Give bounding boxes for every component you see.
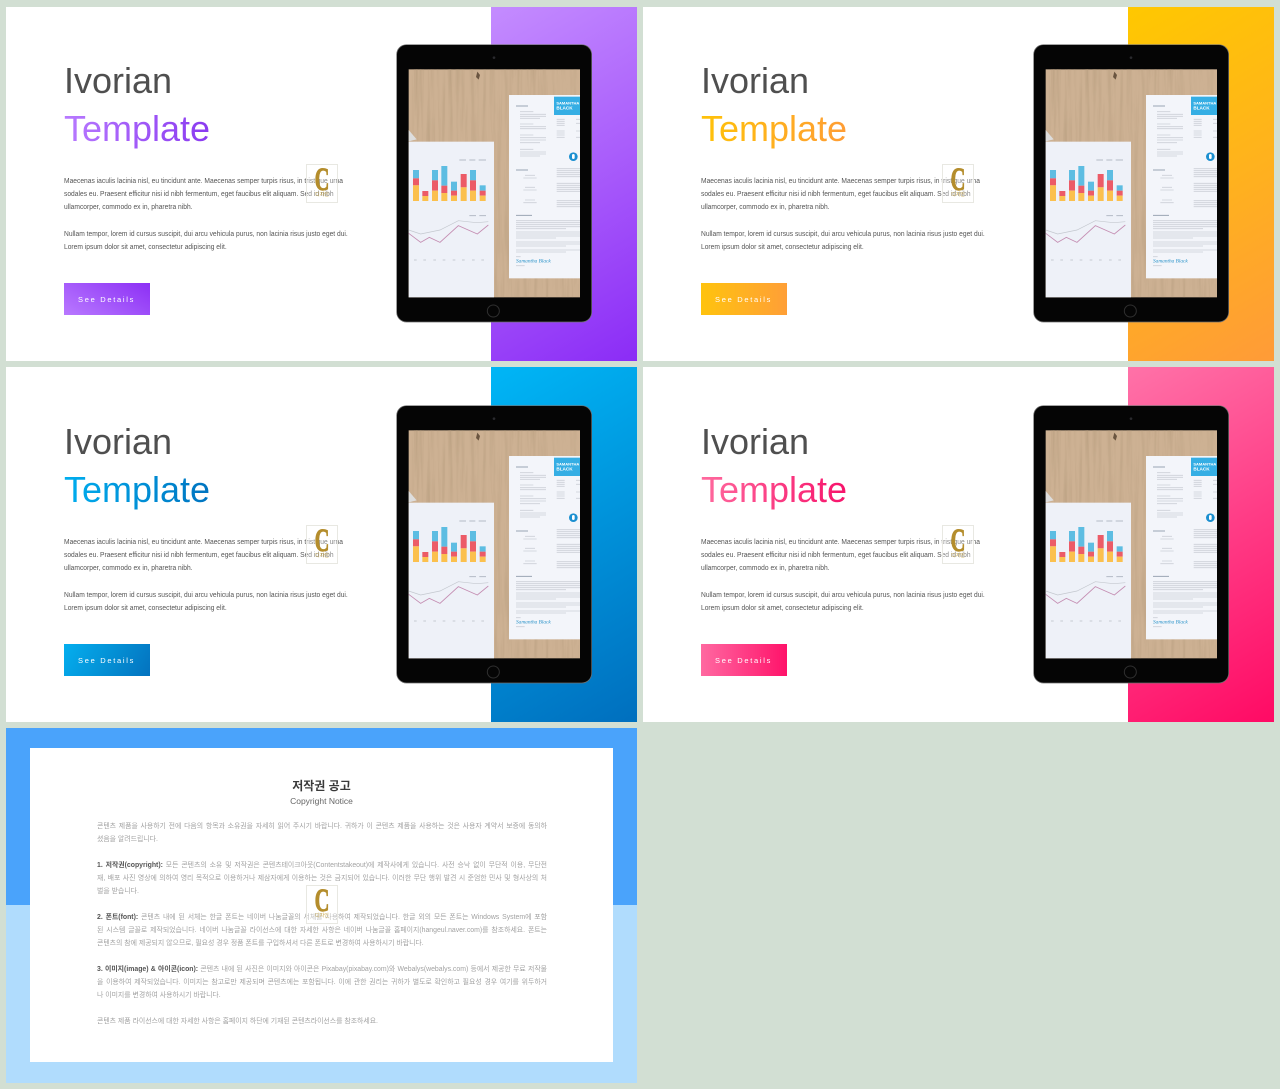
icon: watermark logo bbox=[306, 164, 338, 203]
icon: watermark logo: 디자인 bbox=[951, 553, 965, 559]
text block: notice terms: 재, 배포 사진 영상에 의하여 영리 목적으로 이용하거나 제삼자에게 이용하는 것은 금지되어 있습니다. 이러한 무단 행위 발견 시 준엄한 민사 및 형사상의 처 bbox=[97, 875, 547, 882]
panel: blue slide bbox=[6, 367, 637, 722]
text block: notice terms: 콘텐츠 제품 라이선스에 대한 자세한 사항은 홈페이지 하단에 기재된 콘텐츠라이선스를 참조하세요. bbox=[97, 1018, 378, 1025]
text block: notice terms: 3. 이미지(image) & 아이콘(icon): 콘텐츠 내에 된 사진은 이미지와 아이콘은 Pixabay(pixabay.com)와 Webalys(webalys.com) 등에서 제공한 무료 저작물 bbox=[97, 966, 547, 973]
title: Ivorian Template: Ivorian bbox=[64, 421, 172, 462]
text block: notice terms bbox=[97, 822, 547, 1025]
title: Ivorian Template bbox=[64, 421, 210, 510]
text block: body copy: ullamcorper, commodo ex in, pharetra nibh. bbox=[701, 202, 830, 211]
title: Ivorian Template: Template bbox=[64, 108, 210, 149]
title: Ivorian Template: Ivorian bbox=[701, 60, 809, 101]
title: Ivorian Template bbox=[701, 60, 847, 149]
title: Ivorian Template bbox=[701, 421, 847, 510]
text block: body copy: ullamcorper, commodo ex in, pharetra nibh. bbox=[701, 563, 830, 572]
button: See Details bbox=[64, 283, 150, 315]
text block: notice terms: 을 이용하여 제작되었습니다. 이미지는 참고로만 제공되며 콘텐츠에는 포함됩니다. 이에 관한 권리는 귀하가 별도로 확인하고 필요성 경우 여기를 위두하거 bbox=[97, 979, 547, 986]
button: See Details bbox=[701, 644, 787, 676]
accent strip: blue gradient bbox=[491, 367, 637, 722]
title: Ivorian Template: Template bbox=[701, 108, 847, 149]
heading: 저작권 공고: 저작권 공고 bbox=[292, 779, 351, 793]
panel: copyright notice slide bbox=[6, 728, 637, 1083]
text block: notice terms: 1. 저작권(copyright): 모든 콘텐츠의 소유 및 저작권은 콘텐츠테이크아웃(Contentstakeout)에 제작사에게 있습니다. 사전 승낙 없이 무단적 이용, 무단전 bbox=[97, 862, 547, 869]
icon: watermark logo: 디자인 bbox=[315, 553, 329, 559]
text block: notice terms: 2. 폰트(font): 콘텐츠 내에 된 서체는 한글 폰트는 네이버 나눔글꼴의 서체를 사용하여 제작되었습니다. 한글 외의 모든 폰트는 Windows System에 포함 bbox=[97, 914, 547, 921]
text block: body copy: Lorem ipsum dolor sit amet, consectetur adipiscing elit. bbox=[701, 242, 864, 251]
text block: body copy bbox=[64, 176, 348, 251]
image: tablet showing charts and resume bbox=[396, 44, 592, 322]
text block: body copy: Lorem ipsum dolor sit amet, consectetur adipiscing elit. bbox=[701, 603, 864, 612]
text block: body copy bbox=[701, 537, 985, 612]
icon: watermark logo: 디자인 bbox=[315, 913, 329, 919]
icon: watermark logo bbox=[306, 525, 338, 564]
icon: watermark logo bbox=[942, 164, 974, 203]
text block: body copy: Lorem ipsum dolor sit amet, consectetur adipiscing elit. bbox=[64, 603, 227, 612]
icon: watermark logo bbox=[942, 525, 974, 564]
button: See Details bbox=[701, 283, 787, 315]
panel: pink slide bbox=[643, 367, 1274, 722]
image: tablet showing charts and resume bbox=[396, 405, 592, 684]
text block: body copy bbox=[64, 537, 348, 612]
accent strip: pink gradient bbox=[1128, 367, 1274, 722]
title: Ivorian Template: Ivorian bbox=[64, 60, 172, 101]
button: See Details: See Details bbox=[78, 656, 135, 665]
text block: body copy: Maecenas iaculis lacinia nisl, eu tincidunt ante. Maecenas semper turpis risus, in tristique urna bbox=[701, 176, 980, 185]
title: Ivorian Template: Ivorian bbox=[701, 421, 809, 462]
title: Ivorian Template: Template bbox=[701, 469, 847, 510]
text block: body copy: Nullam tempor, lorem id cursus suscipit, dui arcu vehicula purus, non lacinia risus justo eget dui. bbox=[701, 229, 985, 238]
text block: body copy: sodales eu. Praesent efficitur nisi id nibh fermentum, eget faucibus elit aliquam. Sed id nibh bbox=[64, 550, 334, 559]
image: tablet showing charts and resume bbox=[1033, 405, 1229, 684]
text block: body copy: Maecenas iaculis lacinia nisl, eu tincidunt ante. Maecenas semper turpis risus, in tristique urna bbox=[64, 537, 343, 546]
text block: notice terms: 나 이미지를 변경하여 사용하시기 바랍니다. bbox=[97, 992, 221, 999]
button: See Details: See Details bbox=[78, 295, 135, 304]
icon: watermark logo bbox=[306, 885, 338, 924]
card: notice content bbox=[30, 748, 613, 1062]
text block: body copy: sodales eu. Praesent efficitur nisi id nibh fermentum, eget faucibus elit aliquam. Sed id nibh bbox=[701, 550, 971, 559]
title: Ivorian Template: Template bbox=[64, 469, 210, 510]
accent strip: orange gradient bbox=[1128, 7, 1274, 361]
text block: notice terms: 셨음을 알려드립니다. bbox=[97, 836, 158, 843]
subheading: Copyright Notice: Copyright Notice bbox=[290, 796, 353, 806]
text block: body copy bbox=[701, 176, 985, 251]
text block: notice terms: 콘텐츠 제품을 사용하기 전에 다음의 항목과 소유권을 자세히 읽어 주시기 바랍니다. 귀하가 이 콘텐츠 제품을 사용하는 것은 사용자 계약서 보증에 동의하 bbox=[97, 823, 547, 830]
text block: body copy: Nullam tempor, lorem id cursus suscipit, dui arcu vehicula purus, non lacinia risus justo eget dui. bbox=[701, 590, 985, 599]
title: Ivorian Template bbox=[64, 60, 210, 149]
text block: notice terms: 콘텐츠의 참에 제공되지 않으므로, 필요성 경우 정품 폰트를 구입하셔서 다른 폰트로 변경하여 사용하시기 바랍니다. bbox=[97, 940, 424, 947]
button: See Details: See Details bbox=[715, 656, 772, 665]
text block: body copy: Nullam tempor, lorem id cursus suscipit, dui arcu vehicula purus, non lacinia risus justo eget dui. bbox=[64, 229, 348, 238]
image: tablet showing charts and resume bbox=[1033, 44, 1229, 322]
text block: body copy: Lorem ipsum dolor sit amet, consectetur adipiscing elit. bbox=[64, 242, 227, 251]
text block: body copy: Nullam tempor, lorem id cursus suscipit, dui arcu vehicula purus, non lacinia risus justo eget dui. bbox=[64, 590, 348, 599]
panel: purple slide bbox=[6, 7, 637, 361]
text block: body copy: ullamcorper, commodo ex in, pharetra nibh. bbox=[64, 563, 193, 572]
text block: body copy: sodales eu. Praesent efficitur nisi id nibh fermentum, eget faucibus elit aliquam. Sed id nibh bbox=[64, 189, 334, 198]
text block: body copy: ullamcorper, commodo ex in, pharetra nibh. bbox=[64, 202, 193, 211]
icon: watermark logo: 디자인 bbox=[951, 192, 965, 198]
text block: body copy: Maecenas iaculis lacinia nisl, eu tincidunt ante. Maecenas semper turpis risus, in tristique urna bbox=[64, 176, 343, 185]
text block: notice terms: 벌을 받습니다. bbox=[97, 888, 139, 895]
text block: body copy: Maecenas iaculis lacinia nisl, eu tincidunt ante. Maecenas semper turpis risus, in tristique urna bbox=[701, 537, 980, 546]
text block: notice terms: 된 시스템 글꼴로 제작되었습니다. 네이버 나눔글꼴 라이선스에 대한 자세한 사항은 네이버 나눔글꼴 홈페이지(hangeul.naver.com)를 참조하세요. 폰트는 bbox=[97, 927, 547, 934]
button: See Details bbox=[64, 644, 150, 676]
icon: watermark logo: 디자인 bbox=[315, 192, 329, 198]
button: See Details: See Details bbox=[715, 295, 772, 304]
accent strip: purple gradient bbox=[491, 7, 637, 361]
panel: orange slide bbox=[643, 7, 1274, 361]
text block: body copy: sodales eu. Praesent efficitur nisi id nibh fermentum, eget faucibus elit aliquam. Sed id nibh bbox=[701, 189, 971, 198]
